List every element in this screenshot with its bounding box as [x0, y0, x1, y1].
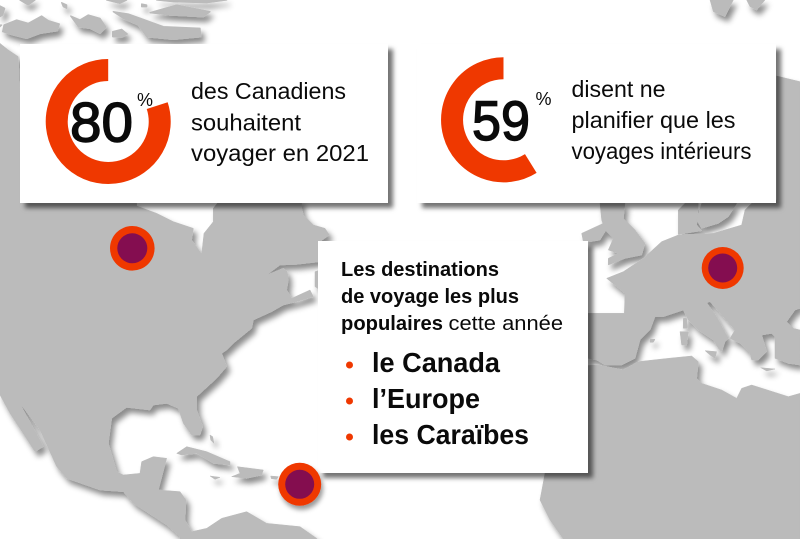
map: Arctic islands	[0, 0, 227, 39]
text: disent ne planifier que les voyages intérieurs: planifier que les	[572, 107, 736, 133]
heading: Les destinations de voyage les plus populaires cette année: de voyage les plus	[341, 286, 519, 308]
percent sign: %	[137, 90, 153, 110]
percent sign: %	[536, 89, 552, 109]
heading: Les destinations de voyage les plus populaires cette année	[341, 259, 563, 335]
map: Scandinavia	[678, 203, 737, 234]
figure: 59: 59	[472, 89, 530, 152]
map: Newfoundland	[315, 270, 320, 290]
list: le Canada: le Canada	[372, 347, 500, 378]
text: disent ne planifier que les voyages intérieurs	[572, 76, 752, 164]
heading: Les destinations de voyage les plus populaires cette année: cette année	[448, 313, 563, 335]
map: Cuba	[177, 447, 230, 465]
list: l'Europe: l’Europe	[372, 383, 480, 414]
donut chart: 80%	[57, 70, 160, 173]
marker: Caribbean	[278, 463, 321, 506]
donut chart: 59%	[452, 68, 531, 171]
map: Great Britain	[600, 203, 645, 265]
text: disent ne planifier que les voyages intérieurs: disent ne	[572, 76, 666, 102]
panel: popular destinations	[318, 241, 588, 473]
map: Hispaniola	[232, 467, 263, 478]
text: des Canadiens souhaitent voyager en 2021: souhaitent	[191, 110, 301, 136]
text: des Canadiens souhaitent voyager en 2021	[191, 78, 369, 166]
heading: Les destinations de voyage les plus populaires cette année: populaires	[341, 313, 443, 335]
map: small Caribbean islands	[210, 435, 278, 479]
map: Ireland	[582, 223, 605, 242]
text: des Canadiens souhaitent voyager en 2021: voyager en 2021	[191, 140, 369, 166]
panel: 59 percent	[417, 44, 776, 203]
figure: 80: 80	[70, 90, 133, 154]
map: Mediterranean islands	[650, 318, 775, 371]
marker: North America	[110, 226, 155, 271]
heading: Les destinations de voyage les plus populaires cette année: Les destinations	[341, 259, 499, 281]
marker: Europe	[702, 247, 744, 289]
map: Africa	[540, 356, 800, 539]
map: Europe	[588, 76, 800, 365]
panel: 80 percent	[20, 44, 388, 203]
text: disent ne planifier que les voyages intérieurs: voyages intérieurs	[572, 138, 752, 164]
map: North and South America	[0, 43, 329, 539]
list: les Caraïbes: les Caraïbes	[372, 419, 529, 450]
map: top islands	[710, 0, 765, 17]
text: des Canadiens souhaitent voyager en 2021: des Canadiens	[191, 78, 346, 104]
